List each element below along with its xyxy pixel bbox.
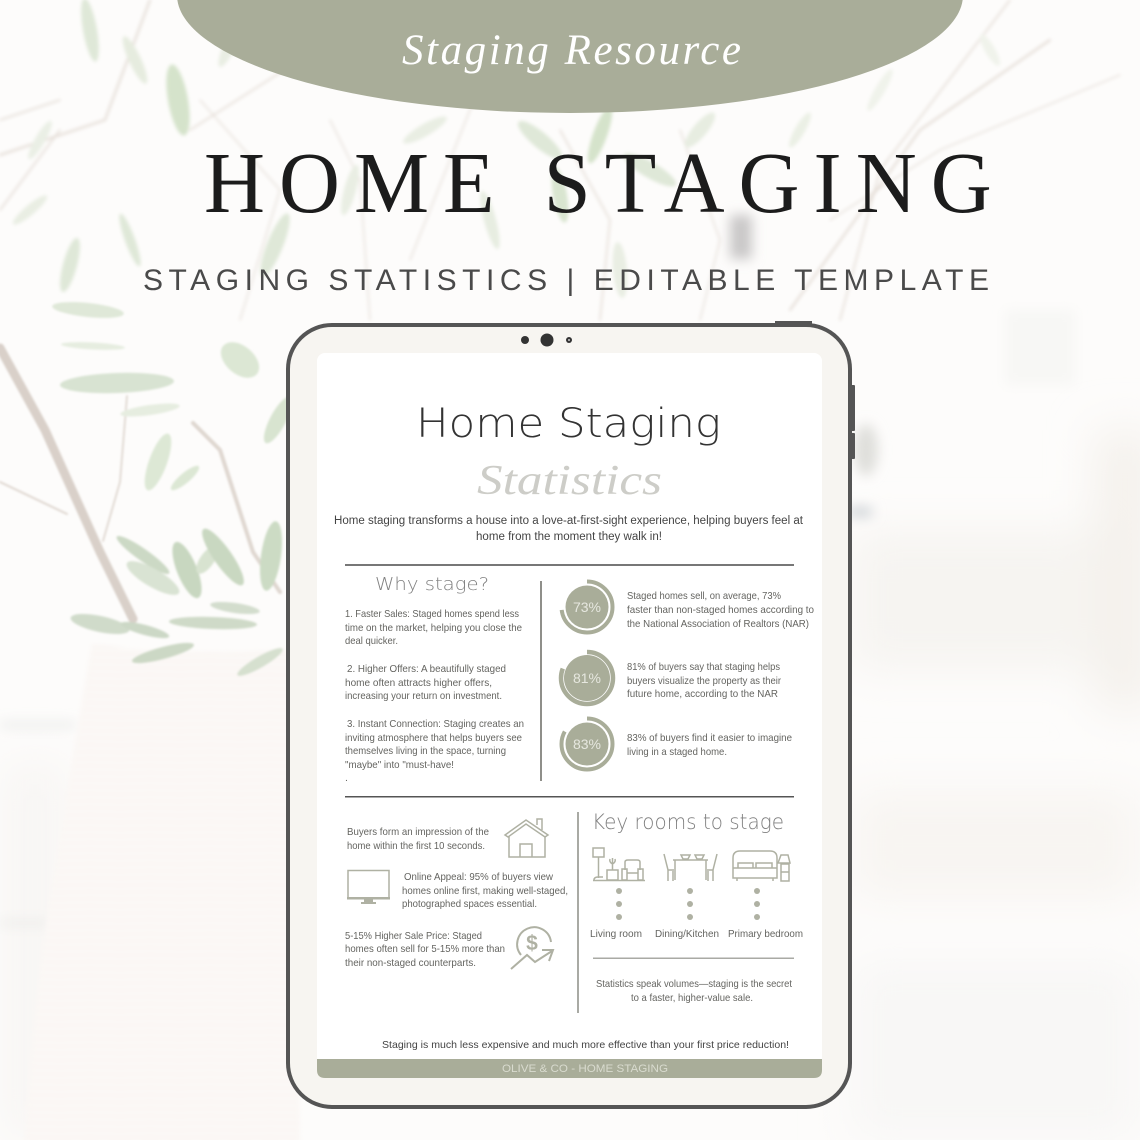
online appeal text: photographed spaces essential. [402,898,537,910]
reason 2: increasing your return on investment. [345,690,502,702]
stat 83% text [627,732,792,758]
reason 2 [345,663,506,702]
reason 3: inviting atmosphere that helps buyers see [345,732,522,744]
panel: statistics [561,582,814,770]
first impression text [347,826,489,852]
stat 73% gauge: 73% [573,599,601,615]
banner shape [177,0,963,113]
icon: living room [593,848,645,880]
reason 2: 2. Higher Offers: A beautifully staged [347,663,506,675]
stat 73% text: the National Association of Realtors (NAR) [627,618,809,630]
stat 81% text: 81% of buyers say that staging helps [627,661,780,673]
banner label: Staging Resource [402,27,741,74]
vase [24,644,300,1140]
branches and olive leaves: lower left [0,299,297,641]
footer bar: OLIVE & CO - HOME STAGING [502,1063,668,1075]
reason 1: time on the market, helping you close the [345,622,522,634]
icon: dollar and rising arrow [511,927,553,969]
top banner [177,0,963,113]
footer bar [317,1059,822,1078]
footer message: Staging is much less expensive and much more effective than your first price reduction! [382,1039,789,1051]
tablet buttons [775,321,855,459]
stat 73% text: faster than non-staged homes according to [627,604,814,616]
vase-front leaves [131,639,285,680]
key rooms heading: Key rooms to stage [592,810,784,834]
closing note: Statistics speak volumes—staging is the secret [596,978,792,990]
stat 73% gauge [562,582,612,632]
branches and olive leaves: upper area [0,0,1120,320]
connector dots [616,888,760,920]
reason 1 [345,608,522,647]
online appeal text: homes online first, making well-staged, [402,885,568,897]
main title: HOME STAGING [204,135,992,231]
stat 83% gauge: 83% [573,736,601,752]
intro text: Home staging transforms a house into a love-at-first-sight experience, helping buyers feel at [334,515,804,527]
screen title: Home Staging [416,401,721,447]
tablet body [288,325,850,1107]
stat 83% text: 83% of buyers find it easier to imagine [627,732,792,744]
stat 73% text: Staged homes sell, on average, 73% [627,590,781,602]
reason 1: deal quicker. [345,635,398,647]
icon: house [505,819,548,857]
stat 81% text: buyers visualize the property as their [627,675,781,687]
stat 83% text: living in a staged home. [627,746,727,758]
higher sale price text: 5-15% Higher Sale Price: Staged [345,930,482,942]
room labels: Living room [590,928,642,940]
panel: key rooms [590,810,803,1004]
reason 3: themselves living in the space, turning [345,745,506,757]
tablet screen [317,353,822,1078]
panel: why stage [345,574,524,784]
panel: buyer facts [345,819,568,969]
reason 3 [345,718,524,784]
icon: bed [733,851,790,881]
icon: monitor [347,870,390,904]
icon: dining table [664,854,717,881]
online appeal text: Online Appeal: 95% of buyers view [404,871,553,883]
first impression text: Buyers form an impression of the [347,826,489,838]
stat 73% text [627,590,814,630]
intro text: home from the moment they walk in! [476,531,662,543]
higher sale price text: homes often sell for 5-15% more than [345,943,505,955]
closing note: to a faster, higher-value sale. [631,992,753,1004]
subtitle: STAGING STATISTICS | EDITABLE TEMPLATE [143,264,989,297]
first impression text: home within the first 10 seconds. [347,840,485,852]
reason 3: . [345,772,348,784]
why stage heading: Why stage? [375,574,489,595]
stat 81% text [627,661,781,700]
stat 83% gauge [562,718,612,770]
stat 81% gauge: 81% [573,670,601,686]
reason 3: "maybe" into "must-have! [345,759,454,771]
stat 81% gauge [561,652,613,704]
reason 3: 3. Instant Connection: Staging creates an [347,718,524,730]
reason 1: 1. Faster Sales: Staged homes spend less [345,608,519,620]
intro text [334,515,804,543]
room labels: Dining/Kitchen [655,928,719,940]
reason 2: home often attracts higher offers, [345,677,492,689]
screen script subtitle: Statistics [477,458,662,504]
higher sale price text [345,930,505,969]
room labels: Primary bedroom [728,928,803,940]
higher sale price text: their non-staged counterparts. [345,957,476,969]
stat 81% text: future home, according to the NAR [627,688,778,700]
closing note [596,978,792,1004]
tablet mockup [288,321,855,1107]
icon: dollar and rising arrow: $ [526,932,538,955]
camera dots [521,334,572,346]
online appeal text [402,871,568,910]
room labels [590,928,803,940]
